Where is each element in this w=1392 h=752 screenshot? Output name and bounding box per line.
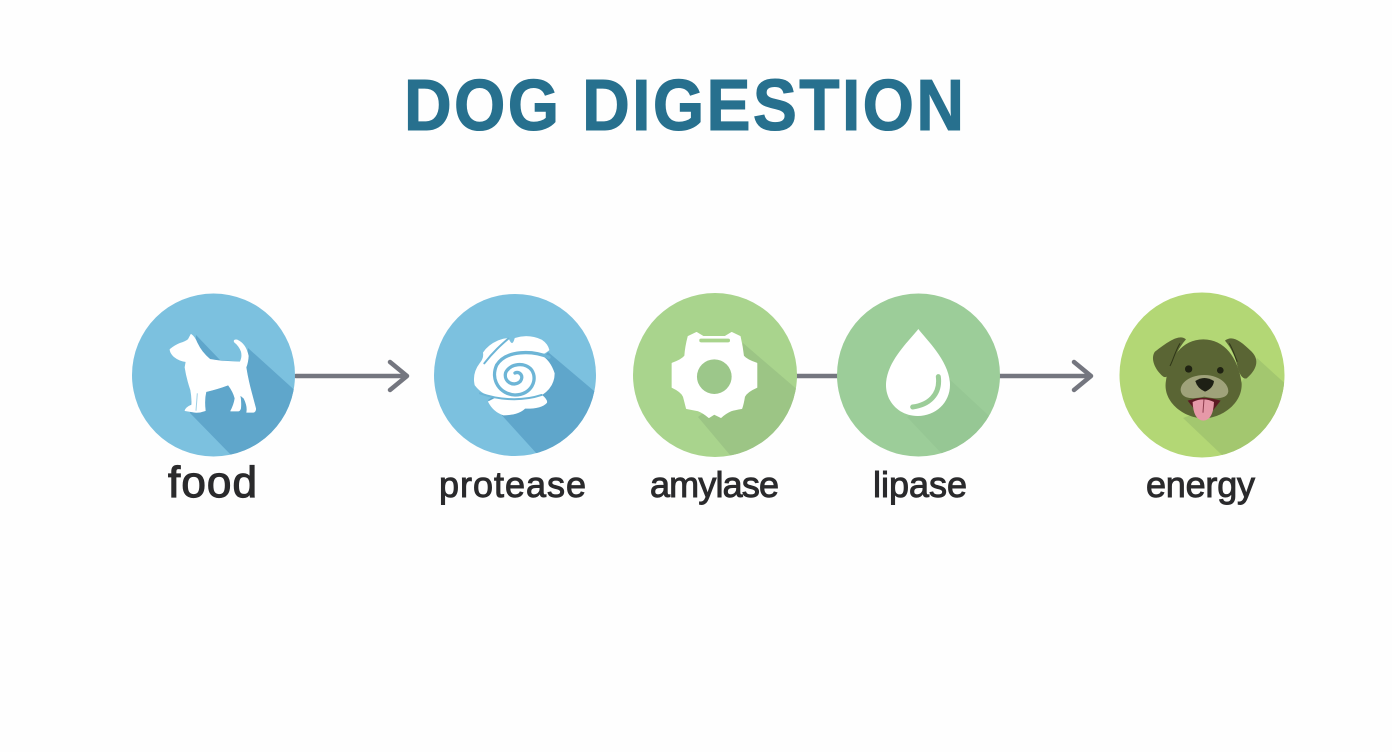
label: protease: protease: [439, 464, 586, 505]
label: energy: energy: [1146, 464, 1255, 505]
step: energy: [1120, 292, 1290, 505]
title: DOG DIGESTION: [404, 64, 964, 146]
label: lipase: lipase: [873, 464, 967, 505]
step: lipase: [837, 294, 1002, 505]
arrow: food to protease: [296, 362, 407, 390]
icon: dog face: [1153, 337, 1256, 421]
connector: amylase to lipase: [796, 374, 838, 378]
icon: dog silhouette: [170, 334, 256, 412]
label: food: food: [168, 458, 257, 507]
label: amylase: amylase: [650, 464, 779, 505]
step: food: [132, 294, 300, 507]
icon: gear: [672, 333, 757, 417]
step: protease: [434, 294, 600, 505]
arrow: lipase to energy: [1000, 362, 1091, 390]
icon: spiral flower: [474, 337, 554, 415]
icon: water drop: [886, 329, 950, 416]
step: amylase: [633, 293, 800, 505]
